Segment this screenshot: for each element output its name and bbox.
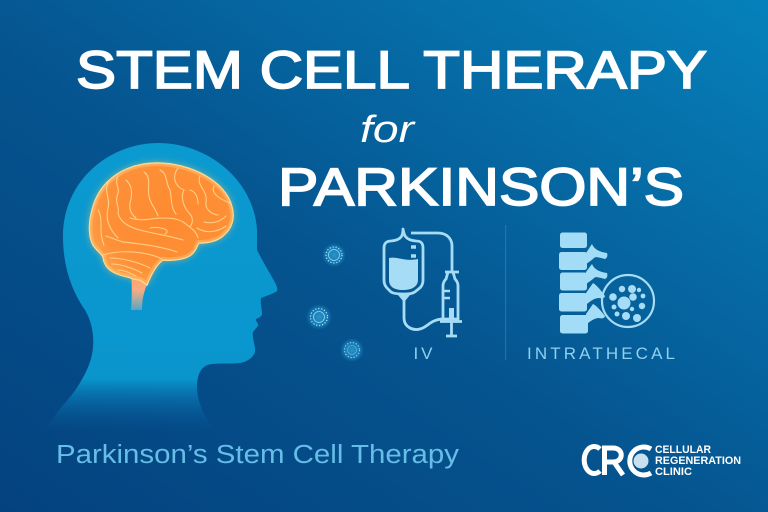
bag outlet <box>398 295 410 301</box>
IV fluid <box>389 258 418 290</box>
title: for: for <box>360 109 416 151</box>
tube to syringe <box>411 233 452 272</box>
head silhouette <box>46 143 277 430</box>
floating stem cells <box>306 243 364 362</box>
drip tube <box>404 296 442 330</box>
stem cell 2 <box>306 304 332 330</box>
IV bag <box>384 229 423 294</box>
brain <box>89 163 233 285</box>
label: Intrathecal: INTRATHECAL <box>527 344 675 363</box>
label: IV: IV <box>414 344 433 363</box>
icon: spine and cell culture <box>559 232 654 334</box>
stem cell 3 <box>340 338 364 362</box>
caption: Parkinson’s Stem Cell Therapy <box>56 441 459 469</box>
brain glow <box>89 163 233 285</box>
brain rim highlight <box>89 163 233 285</box>
icon: IV bag and syringe <box>384 229 462 336</box>
syringe <box>440 272 462 336</box>
brain folds <box>98 168 230 276</box>
title: Parkinson's: PARKINSON’S <box>278 158 684 217</box>
vertebrae <box>559 232 607 334</box>
brain stem <box>131 260 162 310</box>
cell culture dish <box>602 275 654 327</box>
head silhouette with brain <box>46 143 277 430</box>
divider between routes <box>505 225 506 360</box>
logo text: CELLULAR <box>655 444 711 456</box>
bag scale marks <box>411 247 416 256</box>
stem cell 1 <box>322 243 346 267</box>
logo: Cellular Regeneration Clinic: CLINIC <box>655 466 692 478</box>
title: Stem Cell Therapy: STEM CELL THERAPY <box>76 41 707 100</box>
logo mark CRC <box>584 446 651 475</box>
logo: Cellular Regeneration Clinic <box>584 444 741 478</box>
logo: Cellular Regeneration Clinic: REGENERATION <box>655 455 741 467</box>
